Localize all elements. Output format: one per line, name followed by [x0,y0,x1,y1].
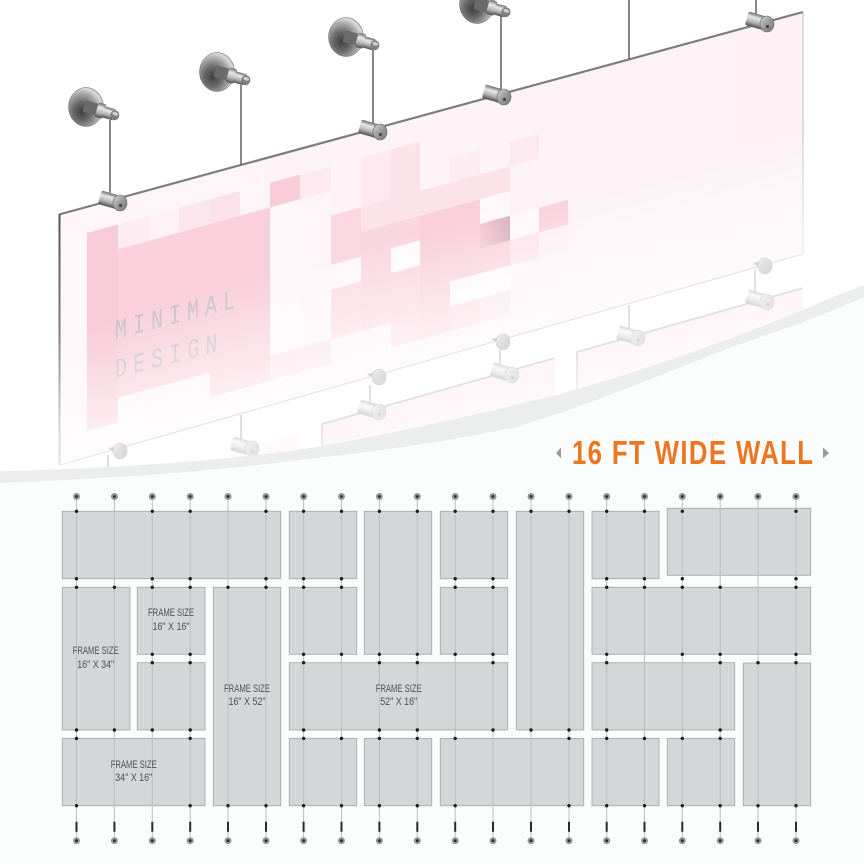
heading: 16 FT WIDE WALL [556,435,829,472]
artwork text: MINIMAL DESIGN [115,286,235,387]
front clamps [230,289,774,457]
panel clamp 4 [745,11,774,32]
label: 52 x 16: FRAME SIZE [376,683,422,695]
wall standoff 1 [68,88,121,126]
wall standoff 4 [460,0,512,24]
top wall anchors [76,493,796,500]
lower cables [108,270,755,472]
frame: top wide [62,508,811,806]
rear bolts [108,258,772,459]
white fade over lower part of the scene [0,0,864,560]
artwork text: MINIMAL DESIGN: DESIGN [115,330,217,387]
pixel mosaic artwork [87,101,568,431]
wall standoff 3 [328,18,381,56]
frame size labels [73,607,422,784]
main hanging graphic panel [59,12,803,465]
label: 16 x 34 [73,645,119,671]
lower panel left [233,434,300,470]
heading text: 16 FT WIDE WALL [572,435,813,472]
panel clamp 3 [482,84,511,105]
lower panel middle [322,358,555,460]
label: 34 x 16: FRAME SIZE [111,759,157,771]
layout diagram [62,496,811,841]
bottom wall anchors [76,822,796,841]
label: 16 x 52 [224,683,270,708]
wall standoff 2 [200,52,252,92]
lower panel right [577,288,803,400]
label: 52 x 16 [376,683,422,708]
panel clamp 1 [98,190,127,211]
lower panel edges [322,288,803,460]
suspension cables, upper panel [110,0,756,197]
curved grey band [0,285,864,483]
artwork text: MINIMAL DESIGN: MINIMAL [115,286,235,348]
label: 16 x 34: 16" X 34" [77,659,114,671]
label: 16 x 16: 16" X 16" [152,621,190,633]
panel clamp 2 [358,119,387,140]
label: 16 x 16 [148,607,194,633]
right arrow [823,448,829,458]
label: 52 x 16: 52" X 16" [380,696,417,708]
label: 16 x 52: FRAME SIZE [224,683,270,695]
lower page background [0,297,864,864]
panel surface [60,12,803,465]
label: 16 x 52: 16" X 52" [228,696,266,708]
label: 16 x 16: FRAME SIZE [148,607,194,619]
hanging cables [76,497,796,838]
clamp points on frames [76,511,796,806]
left arrow [556,448,561,458]
label: 34 x 16: 34" X 16" [115,772,152,784]
lower row panels [108,258,803,472]
panel edges [59,12,803,465]
label: 34 x 16 [111,759,157,784]
label: 16 x 34: FRAME SIZE [73,645,119,657]
